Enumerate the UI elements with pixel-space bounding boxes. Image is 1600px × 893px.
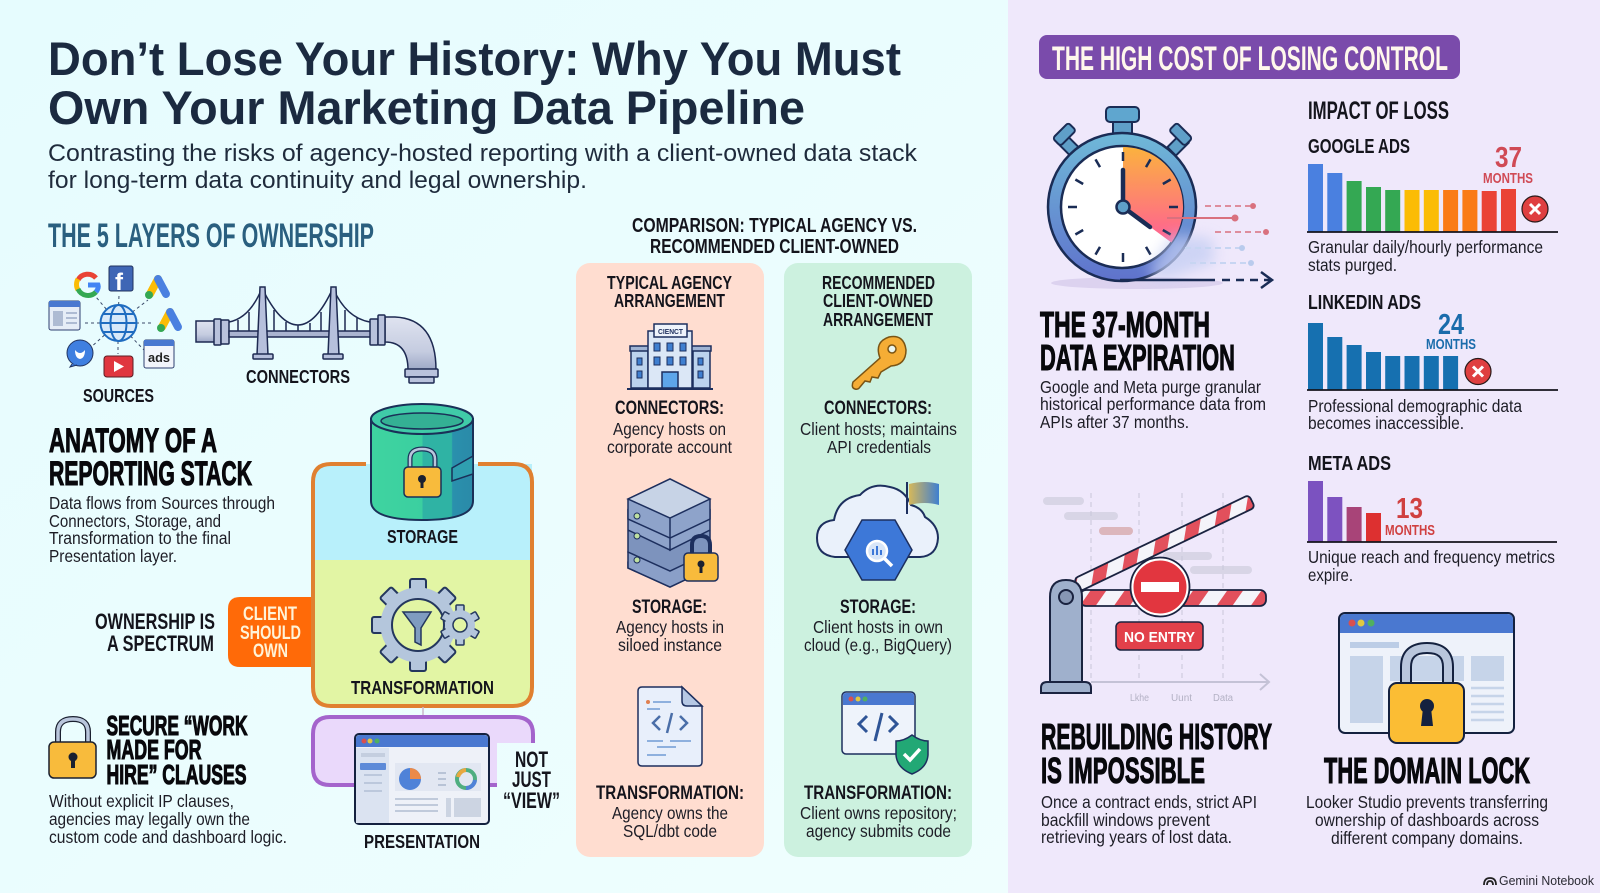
text: client transformation xyxy=(800,783,957,841)
stack: presentation frame xyxy=(313,707,533,785)
label: ownership is a spectrum xyxy=(95,609,215,656)
text: ip clause warning xyxy=(49,791,287,847)
callout: not just view xyxy=(503,747,560,813)
text: meta note: expire. xyxy=(1308,565,1353,585)
title: Don’t Lose Your History: Why You Must xyxy=(48,32,901,85)
text: linkedin note: becomes inaccessible. xyxy=(1308,413,1464,433)
value: 37 months: MONTHS xyxy=(1483,171,1533,187)
text: domain lock description: Looker Studio prevents transferring xyxy=(1306,792,1548,812)
heading: impact of loss: IMPACT OF LOSS xyxy=(1308,97,1449,125)
text: expiration description xyxy=(1040,377,1266,432)
text: expiration description: historical performance data from xyxy=(1040,394,1266,414)
icon cluster: sources xyxy=(49,266,178,377)
icon: cloud with hexagon and flag xyxy=(817,482,939,580)
label: no entry: NO ENTRY xyxy=(1124,629,1195,646)
text: client connectors: CONNECTORS: xyxy=(824,398,932,419)
subtitle xyxy=(48,140,918,194)
icon: bridge pipeline connectors xyxy=(196,287,438,383)
text: client connectors: API credentials xyxy=(827,437,931,457)
icon: facebook: f xyxy=(115,269,124,296)
label: sources: SOURCES xyxy=(83,386,154,406)
heading: typical agency: TYPICAL AGENCY xyxy=(607,272,732,293)
heading: rebuilding history is impossible: IS IMPOSSIBLE xyxy=(1041,750,1205,791)
heading: rebuilding history is impossible: REBUILDING HISTORY xyxy=(1041,716,1272,757)
text: data flow description: Presentation layer. xyxy=(49,546,177,566)
heading: the 37-month data expiration xyxy=(1040,304,1235,378)
text: domain lock description: ownership of dashboards across xyxy=(1315,810,1539,830)
heading: typical agency xyxy=(607,272,732,311)
text: agency transformation: TRANSFORMATION: xyxy=(596,783,744,804)
heading: comparison: COMPARISON: TYPICAL AGENCY VS. xyxy=(632,215,917,237)
label: presentation: PRESENTATION xyxy=(364,832,480,852)
text: data flow description: Transformation to the final xyxy=(49,528,231,548)
text: domain lock description xyxy=(1306,792,1548,848)
value: 13 months: MONTHS xyxy=(1385,523,1435,539)
background: right panel xyxy=(1008,0,1600,893)
icon: browser xyxy=(49,301,80,330)
icon: expired x xyxy=(1522,196,1548,222)
label: no entry xyxy=(1116,622,1203,650)
label: linkedin ads: LINKEDIN ADS xyxy=(1308,292,1421,314)
heading: recommended: ARRANGEMENT xyxy=(823,309,934,330)
text: client transformation: agency submits code xyxy=(806,821,951,841)
text: agency storage: Agency hosts in xyxy=(616,617,724,637)
value: 24 months xyxy=(1426,309,1476,353)
text: rebuilding description xyxy=(1041,792,1257,847)
callout: not just view: “VIEW” xyxy=(503,788,560,813)
text: data flow description xyxy=(49,493,275,566)
heading: recommended: RECOMMENDED xyxy=(822,272,935,293)
text: client transformation: TRANSFORMATION: xyxy=(804,783,952,804)
icon: padlock on cylinder xyxy=(404,449,441,497)
stack: client-owned frame storage and transformation xyxy=(313,464,532,706)
text: agency connectors: CONNECTORS: xyxy=(615,398,724,419)
heading: secure work made for hire clauses: HIRE” CLAUSES xyxy=(106,759,246,790)
icon: video xyxy=(104,356,133,377)
heading: recommended: CLIENT-OWNED xyxy=(823,290,933,311)
icon: transformation gears xyxy=(372,579,479,671)
text: client storage: cloud (e.g., BigQuery) xyxy=(804,635,952,655)
icon: google ads right xyxy=(157,312,178,332)
text: google ads note: stats purged. xyxy=(1308,255,1397,275)
icon: key xyxy=(852,337,906,389)
text: ip clause warning: Without explicit IP clauses, xyxy=(49,791,234,811)
callout: not just view: JUST xyxy=(512,767,551,792)
icon: code window with shield xyxy=(842,692,928,774)
heading: rebuilding history is impossible xyxy=(1041,716,1272,791)
text: ip clause warning: agencies may legally own the xyxy=(49,809,250,829)
heading: the 37-month data expiration: THE 37-MONTH xyxy=(1040,304,1210,345)
heading: anatomy of a reporting stack xyxy=(49,422,252,493)
text: data flow description: Connectors, Storage, and xyxy=(49,511,221,531)
label: google ads: GOOGLE ADS xyxy=(1308,136,1410,158)
text: agency storage: STORAGE: xyxy=(632,597,707,618)
icon: server stack with lock xyxy=(628,479,718,587)
heading banner: the high cost of losing control xyxy=(1039,35,1460,79)
icon: code document xyxy=(638,687,702,766)
title: Own Your Marketing Data Pipeline xyxy=(48,81,805,134)
chart: google ads xyxy=(1307,136,1558,275)
panel: typical agency arrangement xyxy=(576,263,764,857)
icon: office building: CIENCT xyxy=(658,329,684,336)
heading: recommended xyxy=(822,272,935,330)
text: client connectors xyxy=(800,398,957,457)
heading: secure work made for hire clauses xyxy=(106,710,248,790)
value: 24 months: MONTHS xyxy=(1426,337,1476,353)
heading: secure work made for hire clauses: MADE FOR xyxy=(106,734,202,765)
text: client storage: STORAGE: xyxy=(840,597,916,618)
text: agency storage xyxy=(616,597,724,655)
callout: client should own: SHOULD xyxy=(240,622,301,644)
label: connectors: CONNECTORS xyxy=(246,367,350,387)
label: ownership is a spectrum: OWNERSHIP IS xyxy=(95,609,215,634)
text: client connectors: Client hosts; maintains xyxy=(800,419,957,439)
text: meta note xyxy=(1308,547,1555,585)
text: rebuilding description: backfill windows prevent xyxy=(1041,810,1210,830)
heading: the 5 layers of ownership: THE 5 LAYERS OF OWNERSHIP xyxy=(48,217,374,255)
text: google ads note xyxy=(1308,237,1543,275)
icon: stopwatch with speed lines xyxy=(1048,107,1272,289)
value: 13 months xyxy=(1385,493,1435,539)
background: left panel xyxy=(0,0,1010,893)
heading: secure work made for hire clauses: SECURE “WORK xyxy=(106,710,248,741)
icon: storage cylinder xyxy=(371,404,473,520)
illustration: barrier no entry: Uunt xyxy=(1171,693,1192,704)
text: meta note: Unique reach and frequency metrics xyxy=(1308,547,1555,567)
icon: locked browser window xyxy=(1339,613,1514,743)
value: 24 months: 24 xyxy=(1438,309,1464,341)
label: transformation: TRANSFORMATION xyxy=(351,678,494,698)
icon: dashboard window xyxy=(355,734,489,824)
text: rebuilding description: retrieving years of lost data. xyxy=(1041,827,1232,847)
panel: recommended client-owned arrangement xyxy=(784,263,972,857)
text: expiration description: APIs after 37 months. xyxy=(1040,412,1189,432)
icon: google ads top xyxy=(145,279,166,299)
text: agency connectors xyxy=(607,398,732,457)
icon: globe xyxy=(100,305,136,341)
subtitle: Contrasting the risks of agency-hosted reporting with a client-owned data stack xyxy=(48,140,918,167)
label: storage: STORAGE xyxy=(387,527,458,547)
text: domain lock description: different company domains. xyxy=(1331,828,1523,848)
text: agency transformation xyxy=(596,783,744,841)
illustration: barrier no entry xyxy=(1041,493,1269,704)
heading: anatomy of a reporting stack: REPORTING STACK xyxy=(49,455,252,493)
text: google ads note: Granular daily/hourly performance xyxy=(1308,237,1543,257)
illustration: barrier no entry: Lkhe xyxy=(1130,693,1149,704)
value: 13 months: 13 xyxy=(1396,493,1423,525)
text: ip clause warning: custom code and dashboard logic. xyxy=(49,827,287,847)
heading: the 37-month data expiration: DATA EXPIRATION xyxy=(1040,337,1235,378)
illustration: barrier no entry: Data xyxy=(1213,693,1233,704)
callout: client should own xyxy=(228,597,311,667)
callout: not just view: NOT xyxy=(515,747,548,772)
icon: chat bubble xyxy=(67,340,93,367)
chart: linkedin ads xyxy=(1307,292,1558,433)
icon: padlock work for hire xyxy=(49,719,96,778)
text: rebuilding description: Once a contract ends, strict API xyxy=(1041,792,1257,812)
text: client storage: Client hosts in own xyxy=(813,617,943,637)
callout: client should own: CLIENT xyxy=(243,603,297,625)
icon: expired x xyxy=(1465,358,1491,384)
chart: meta ads xyxy=(1307,453,1557,585)
icon: ads window: ads xyxy=(148,350,170,365)
label: ownership is a spectrum: A SPECTRUM xyxy=(107,631,214,656)
icon: office building xyxy=(627,324,713,389)
text: linkedin note: Professional demographic data xyxy=(1308,396,1522,416)
value: 37 months: 37 xyxy=(1495,142,1522,174)
heading: anatomy of a reporting stack: ANATOMY OF A xyxy=(49,422,217,460)
callout: client should own: OWN xyxy=(253,640,288,662)
subtitle: for long-term data continuity and legal ownership. xyxy=(48,167,587,194)
value: 37 months xyxy=(1483,142,1533,187)
text: linkedin note xyxy=(1308,396,1522,433)
text: client transformation: Client owns repository; xyxy=(800,803,957,823)
icon: google xyxy=(77,274,98,295)
text: agency transformation: Agency owns the xyxy=(612,803,728,823)
text: agency transformation: SQL/dbt code xyxy=(623,821,717,841)
text: agency connectors: Agency hosts on xyxy=(613,419,726,439)
text: data flow description: Data flows from Sources through xyxy=(49,493,275,513)
label: meta ads: META ADS xyxy=(1308,453,1391,475)
text: agency storage: siloed instance xyxy=(618,635,722,655)
text: agency connectors: corporate account xyxy=(607,437,732,457)
text: client storage xyxy=(804,597,952,655)
heading: typical agency: ARRANGEMENT xyxy=(614,290,726,311)
title xyxy=(48,32,901,134)
heading: comparison: RECOMMENDED CLIENT-OWNED xyxy=(650,236,899,258)
text: expiration description: Google and Meta purge granular xyxy=(1040,377,1261,397)
heading: comparison xyxy=(632,215,917,258)
watermark: gemini notebook: Gemini Notebook xyxy=(1499,873,1594,888)
